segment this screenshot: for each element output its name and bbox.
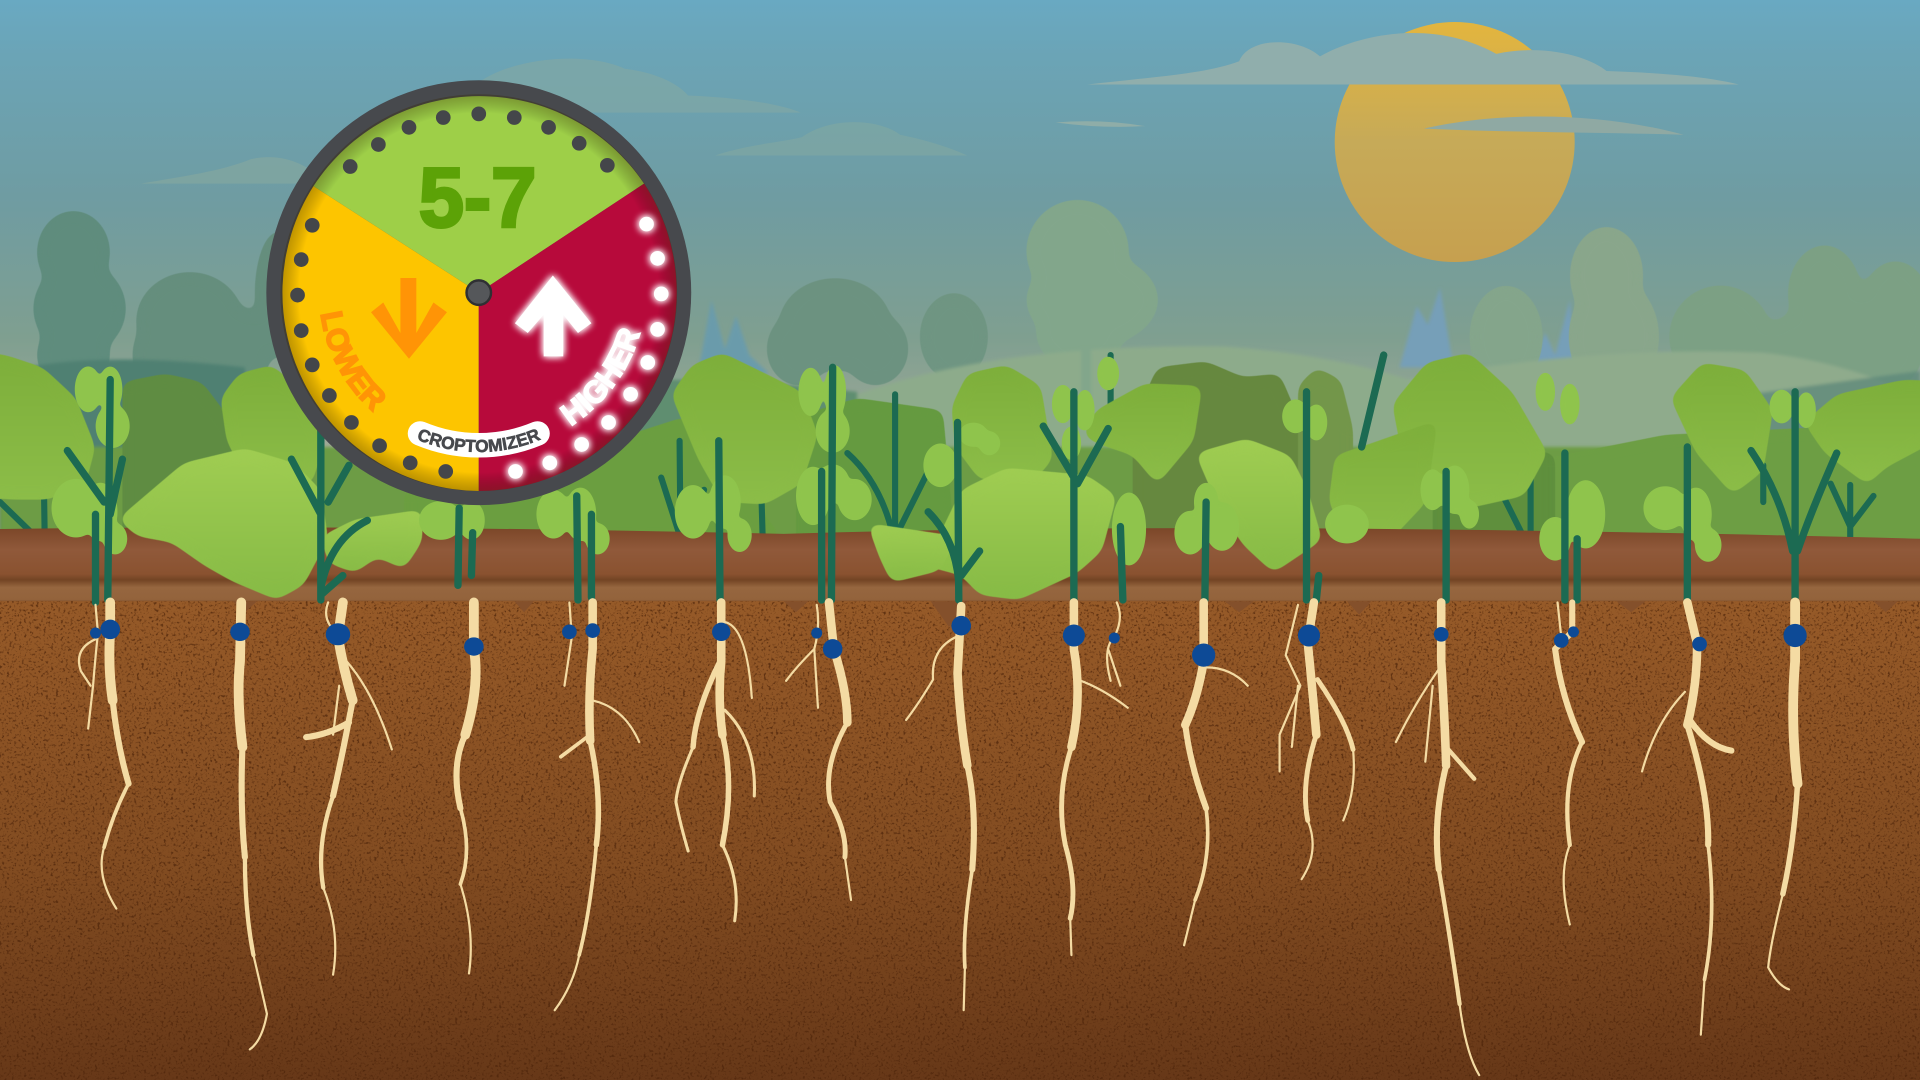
distant trees xyxy=(33,200,1920,404)
large mid-ground leaves xyxy=(0,349,1920,547)
big leaf right xyxy=(1195,438,1322,573)
root plant 3 xyxy=(306,602,392,975)
root plant 7 xyxy=(786,602,851,900)
root plant 13 xyxy=(1555,602,1582,924)
root plant 9 xyxy=(1062,602,1128,955)
croptomizer badge xyxy=(420,433,538,445)
root plant 6 xyxy=(676,602,754,921)
root plant 15 xyxy=(1768,602,1798,989)
small leaf clusters xyxy=(51,356,1816,566)
root plant 14 xyxy=(1642,602,1731,1035)
back plant stems xyxy=(0,355,1873,579)
root plant 5 xyxy=(555,602,639,1010)
root plant 8 xyxy=(906,606,974,1010)
stems xyxy=(67,355,1837,602)
croptomizer gauge xyxy=(266,80,692,506)
croptomizer label: CROPTOMIZER xyxy=(418,429,542,452)
higher label: HIGHER xyxy=(554,322,646,432)
small leaf left xyxy=(321,509,422,573)
root plant 1 xyxy=(79,602,129,909)
blue conifers xyxy=(698,288,1577,380)
root nodules xyxy=(90,616,1807,667)
root plant 11 xyxy=(1280,602,1354,879)
foreground plants xyxy=(51,355,1837,602)
dark dots xyxy=(290,107,615,479)
big leaf left xyxy=(118,448,328,600)
background bushes xyxy=(0,361,1920,545)
green optimal sector xyxy=(313,96,644,293)
red higher sector xyxy=(479,184,677,491)
sun xyxy=(1335,22,1575,262)
gauge rim xyxy=(266,80,691,505)
lower label: LOWER xyxy=(320,310,386,414)
sky background xyxy=(0,0,1920,563)
inner rim shadow xyxy=(280,94,677,491)
root plant 2 xyxy=(239,602,267,1049)
optimal range number: 5-7 xyxy=(419,151,536,245)
white glowing dots xyxy=(508,217,669,479)
root plant 4 xyxy=(456,602,476,973)
root plant 12 xyxy=(1396,602,1479,1075)
root plant 10 xyxy=(1184,602,1248,945)
roots xyxy=(79,602,1798,1075)
distant hills xyxy=(0,346,1920,539)
small leaf centre xyxy=(867,523,958,583)
clouds xyxy=(141,33,1739,184)
centre hub xyxy=(467,280,491,305)
soil surface band xyxy=(0,527,1920,602)
big leaf centre xyxy=(924,468,1117,600)
underground soil xyxy=(0,601,1920,1080)
down arrow xyxy=(371,278,447,359)
up arrow xyxy=(515,276,591,356)
yellow lower sector xyxy=(282,186,479,491)
